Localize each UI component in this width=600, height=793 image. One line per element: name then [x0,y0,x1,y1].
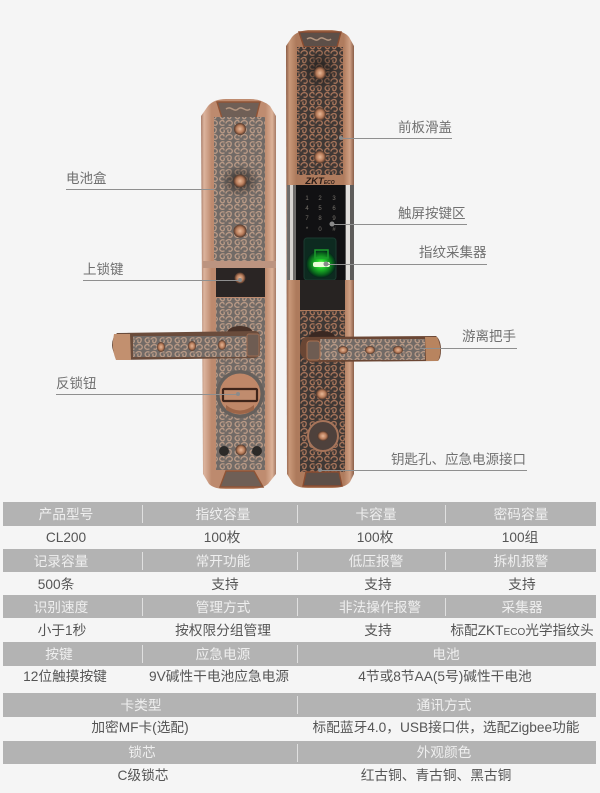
touch keypad panel: 9 [332,216,336,222]
row 4: 4节或8节AA(5号)碱性干电池 [358,669,532,684]
lock illustration [56,30,527,489]
row 2: 支持 [211,577,239,592]
row 1: 产品型号 [39,507,93,522]
row 1: 100枚 [357,530,393,545]
row 3: 管理方式 [196,600,250,615]
row 3: 支持 [364,623,392,638]
label: fingerprint collector: 指纹采集器 [419,245,486,260]
row 3: 按权限分组管理 [175,623,271,638]
label: battery box: 电池盒 [66,171,106,186]
label: anti-lock knob: 反锁钮 [56,376,96,391]
left spindle base [227,326,253,340]
row 2: 拆机报警 [494,554,548,569]
row 3: 采集器 [501,600,543,615]
row 4: 电池 [432,647,460,662]
row 1: 100组 [502,530,538,545]
left handle [112,331,260,360]
right handle [300,336,441,362]
row 1: CL200 [46,530,86,545]
touch keypad panel: 7 [305,216,309,222]
row 5: 卡类型 [120,698,162,713]
row 3 [3,595,596,638]
touch keypad panel: 3 [332,196,336,202]
row 3: 识别速度 [34,600,88,615]
left lower ornate panel [216,298,265,470]
left bottom cap [220,471,263,487]
row 5 [3,693,596,735]
row 3: 标配ZKTECO光学指纹头 [450,623,594,638]
row 6 [3,741,596,783]
left lock body [201,99,276,489]
row 4 [3,642,596,684]
lock key button [234,272,246,284]
touch keypad panel: 8 [318,216,322,222]
right upper buttons [301,50,339,164]
row 3: 小于1秒 [38,623,86,638]
row 2: 支持 [364,577,392,592]
touch keypad panel: 2 [318,196,322,202]
row 6: 红古铜、青古铜、黑古铜 [361,768,511,783]
touch keypad panel: 0 [318,227,322,233]
spec table [3,502,596,783]
right lower ornate panel [300,311,345,472]
label: front sliding cover: 前板滑盖 [398,120,452,135]
row 5: 标配蓝牙4.0，USB接口供，选配Zigbee功能 [313,720,579,735]
right bottom cap [303,472,342,486]
left bottom holes [219,444,262,456]
right black panel [300,280,345,310]
row 2: 低压报警 [349,554,403,569]
ZKT logo: ZKTECO [304,176,335,187]
left top cap [217,102,260,118]
row 6: 锁芯 [128,745,156,760]
thumb turn [216,370,264,418]
row 5: 加密MF卡(选配) [91,720,189,735]
left upper buttons [220,123,260,238]
row 2: 记录容量 [34,554,88,569]
right top cap [299,32,341,47]
label: keyhole and emergency power: 钥匙孔、应急电源接口 [391,452,526,467]
left seam [203,261,276,268]
label: lock key: 上锁键 [83,262,124,277]
row 4: 按键 [45,647,73,662]
row 5: 通讯方式 [417,698,471,713]
row 4: 应急电源 [196,647,250,662]
callout dots [236,136,343,472]
touch keypad panel: 6 [332,206,336,212]
touch keypad panel: 5 [318,206,322,212]
row 1: 100枚 [204,530,240,545]
row 2 [3,549,596,592]
row 2: 500条 [38,577,74,592]
touch keypad panel [296,185,345,280]
row 1 [3,502,596,545]
label: free handle: 游离把手 [462,329,516,344]
silver side rails [287,185,354,280]
right lock body [286,30,354,488]
left black lock panel [216,268,265,297]
right lower buttons [308,388,338,451]
row 1: 指纹容量 [196,507,250,522]
row 4: 9V碱性干电池应急电源 [149,669,289,684]
row 3: 非法操作报警 [339,600,421,615]
touch keypad panel: * [306,227,309,233]
touch keypad panel: 1 [305,196,309,202]
touch keypad panel: 4 [305,206,309,212]
row 1: 卡容量 [355,507,397,522]
right spindle base [309,331,335,343]
row 1: 密码容量 [494,507,548,522]
row 6: C级锁芯 [118,768,168,783]
fingerprint sensor [304,238,336,280]
left upper ornate panel [214,117,265,262]
row 6: 外观颜色 [417,745,471,760]
row 2: 支持 [508,577,536,592]
row 4: 12位触摸按键 [23,669,107,684]
right upper ornate panel [297,47,343,175]
label: touch key area: 触屏按键区 [398,206,466,221]
row 2: 常开功能 [196,554,250,569]
touch keypad panel: # [332,227,336,233]
callout leader lines [56,138,527,470]
